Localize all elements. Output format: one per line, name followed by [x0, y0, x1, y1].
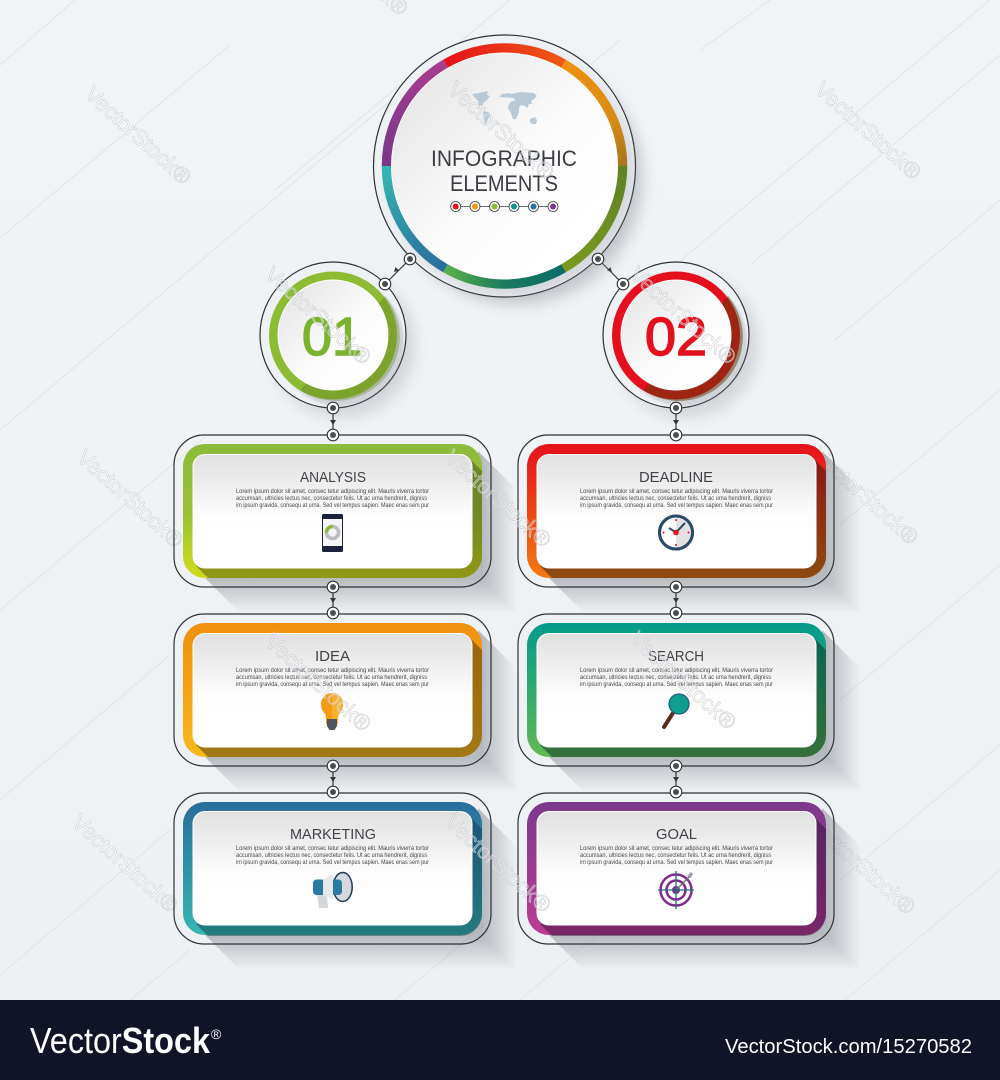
main white disc — [392, 53, 618, 279]
icon: target — [658, 871, 694, 909]
connectors between main circle and number circles — [385, 259, 623, 284]
overlay watermarks: VectorStock® — [443, 76, 559, 184]
overlay watermarks: VectorStock® — [625, 626, 741, 734]
body text — [580, 845, 774, 866]
body text: accumsan, ultricies lectus nec, consectetur felis. Ut ac urna hendrerit, digniss — [580, 674, 772, 681]
circle 01 — [260, 262, 416, 418]
overlay watermarks: VectorStock® — [260, 261, 376, 369]
overlay watermarks — [260, 76, 741, 917]
watermarks: VectorStock® — [80, 81, 196, 189]
watermarks: VectorStock® — [72, 444, 188, 552]
body text: Lorem ipsum dolor sit amet, consec tetur adipiscing elit. Mauris viverra tortor — [236, 488, 430, 495]
registered mark: ® — [211, 1026, 222, 1042]
footer url: VectorStock.com/15270582 — [725, 1036, 972, 1058]
body text: im ipsum gravida, consequ at urna. Sed vel tempus sapien. Maec enas sem pur — [236, 681, 430, 688]
title: DEADLINE — [639, 469, 713, 486]
body text: im ipsum gravida, consequ at urna. Sed vel tempus sapien. Maec enas sem pur — [580, 681, 774, 688]
body text: im ipsum gravida, consequ at urna. Sed vel tempus sapien. Maec enas sem pur — [236, 859, 430, 866]
body text: accumsan, ultricies lectus nec, consectetur felis. Ut ac urna hendrerit, digniss — [580, 495, 772, 502]
icon: smartphone — [322, 514, 343, 552]
title: SEARCH — [648, 648, 704, 665]
main title — [431, 146, 577, 196]
card: marketing — [174, 793, 517, 970]
body text: im ipsum gravida, consequ at urna. Sed vel tempus sapien. Maec enas sem pur — [580, 859, 774, 866]
main title: ELEMENTS — [450, 171, 558, 196]
overlay watermarks: VectorStock® — [260, 628, 376, 736]
icon: megaphone — [313, 872, 352, 908]
body text: accumsan, ultricies lectus nec, consectetur felis. Ut ac urna hendrerit, digniss — [236, 495, 428, 502]
overlay watermarks: VectorStock® — [440, 444, 556, 552]
watermarks: VectorStock® — [67, 809, 183, 917]
body text: Lorem ipsum dolor sit amet, consec tetur adipiscing elit. Mauris viverra tortor — [236, 845, 430, 852]
overlay watermarks: VectorStock® — [625, 261, 741, 369]
world map — [472, 91, 537, 125]
footer bar — [0, 1000, 1000, 1080]
title: IDEA — [315, 648, 350, 665]
body text: im ipsum gravida, consequ at urna. Sed vel tempus sapien. Maec enas sem pur — [580, 502, 774, 509]
card: analysis — [174, 435, 517, 613]
card: idea — [174, 614, 517, 792]
title: MARKETING — [290, 826, 376, 843]
watermarks: VectorStock® — [804, 811, 920, 919]
icon: clock — [660, 516, 693, 549]
watermarks: VectorStock® — [810, 76, 926, 184]
body text — [580, 488, 774, 509]
body text: Lorem ipsum dolor sit amet, consec tetur adipiscing elit. Mauris viverra tortor — [580, 488, 774, 495]
body text: accumsan, ultricies lectus nec, consectetur felis. Ut ac urna hendrerit, digniss — [236, 852, 428, 859]
body text: Lorem ipsum dolor sit amet, consec tetur adipiscing elit. Mauris viverra tortor — [580, 667, 774, 674]
segmented colour ring — [387, 48, 622, 284]
body text — [580, 667, 774, 688]
body text: accumsan, ultricies lectus nec, consectetur felis. Ut ac urna hendrerit, digniss — [236, 674, 428, 681]
card: search — [518, 614, 861, 792]
overlay watermarks: VectorStock® — [440, 809, 556, 917]
watermarks — [67, 0, 926, 919]
timeline dots — [451, 202, 558, 212]
body text — [236, 488, 430, 509]
circle 02 — [603, 262, 759, 418]
body text — [236, 845, 430, 866]
connector nodes — [327, 253, 682, 798]
body text: im ipsum gravida, consequ at urna. Sed vel tempus sapien. Maec enas sem pur — [236, 502, 430, 509]
title: ANALYSIS — [300, 469, 366, 486]
body text — [236, 667, 430, 688]
main circle outline — [374, 35, 636, 297]
number 02: 02 — [645, 307, 707, 367]
footer logo: VectorStock — [30, 1020, 211, 1061]
watermarks: VectorStock® — [807, 441, 923, 549]
number 01: 01 — [302, 307, 362, 367]
body text: Lorem ipsum dolor sit amet, consec tetur adipiscing elit. Mauris viverra tortor — [580, 845, 774, 852]
main circle — [374, 35, 644, 306]
body text: Lorem ipsum dolor sit amet, consec tetur adipiscing elit. Mauris viverra tortor — [236, 667, 430, 674]
title: GOAL — [656, 826, 697, 843]
icon: light bulb — [321, 693, 343, 730]
card: goal — [518, 793, 861, 970]
card: deadline — [518, 435, 861, 613]
body text: accumsan, ultricies lectus nec, consectetur felis. Ut ac urna hendrerit, digniss — [580, 852, 772, 859]
main title: INFOGRAPHIC — [431, 146, 577, 171]
icon: magnifier — [664, 694, 689, 727]
